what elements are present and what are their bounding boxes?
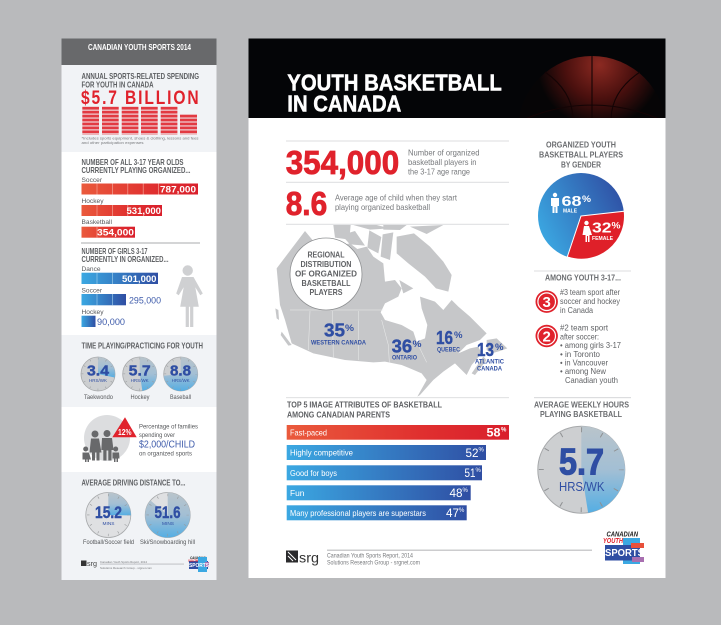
stat: 354,000 players: basketball players in: [408, 157, 477, 167]
heading: top 5 image attributes: TOP 5 IMAGE ATTRIBUTES OF BASKETBALL: [287, 401, 442, 410]
bars: all 3-17 year olds: 531,000: [126, 206, 161, 216]
bar: Highly competitive 52%: [287, 445, 486, 460]
heading: top 5 image attributes: AMONG CANADIAN PARENTS: [287, 410, 390, 419]
text: families spending: on organized sports: [139, 450, 193, 458]
bars: all 3-17 year olds: Basketball: [82, 219, 112, 226]
clock: Hockey 5.7: 5.7: [129, 363, 151, 380]
label: Atlantic Canada 13%: 13: [477, 340, 494, 360]
spending section: FOR YOUTH IN CANADA: [82, 80, 154, 90]
text: families spending: $2,000/CHILD: [139, 440, 195, 451]
bar: Highly competitive 52%: %: [478, 448, 484, 454]
stat: 8.6 average age: playing organized basketball: [335, 202, 430, 212]
badge: number 3: 3: [543, 294, 551, 311]
stat: 8.6 average age: [286, 186, 458, 223]
badge: number 2: 2: [543, 328, 551, 346]
bars: all 3-17 year olds: Hockey: [82, 198, 104, 205]
icon: basketball: [526, 56, 658, 118]
bars: all 3-17 year olds: Soccer: [82, 177, 103, 184]
callout circle: BASKETBALL: [302, 279, 350, 288]
pie chart: players by gender: MALE: [563, 209, 578, 215]
label: Western Canada 35%: WESTERN CANADA: [311, 339, 366, 346]
header band with basketball: [248, 38, 666, 118]
text: families spending: Percentage of families: [139, 424, 199, 430]
logo: Canadian Youth Sports: CANADIAN: [606, 530, 638, 539]
text: number 2 team sport: • in Vancouver: [560, 357, 608, 367]
bars: all 3-17 year olds: CURRENTLY PLAYING ORGANIZED...: [82, 166, 190, 175]
text: number 2 team sport: [560, 322, 621, 385]
spending section: *Includes sports equipment, shoes & clothing, lessons and fees: [82, 136, 199, 140]
text: families spending: [139, 424, 199, 458]
bar: Highly competitive 52%: Highly competitive: [290, 448, 353, 458]
text: number 2 team sport: • among girls 3-17: [560, 340, 621, 350]
panel header: CANADIAN YOUTH SPORTS 2014: [88, 43, 191, 52]
left panel footer: SPORTS: [189, 563, 210, 569]
text: families spending: spending over: [139, 432, 176, 439]
bar: Highly competitive 52%: 52: [466, 446, 479, 460]
clock: Taekwondo 3.4: [81, 357, 115, 401]
bar: Fun 48%: Fun: [290, 488, 305, 498]
stat: 354,000 players: [286, 145, 480, 182]
title: YOUTH BASKETBALL: [287, 70, 502, 96]
bar: Many professional players are superstars 47%: 47: [446, 506, 459, 520]
label: Quebec 16%: QUEBEC: [437, 347, 460, 354]
clock: average weekly hours 5.7: PLAYING BASKETBALL: [540, 409, 622, 419]
pie chart: players by gender: ORGANIZED YOUTH: [546, 140, 616, 150]
callout circle: REGIONAL: [308, 251, 344, 260]
pie chart: players by gender: FEMALE: [592, 236, 614, 242]
stat: 8.6 average age: Average age of child when they start: [335, 192, 458, 202]
title: IN CANADA: [287, 91, 401, 117]
text: number 2 team sport: Canadian youth: [565, 375, 618, 385]
clock: Ski/Snowboarding hill 51.6: [140, 492, 195, 546]
clock: Baseball 8.8: [164, 357, 198, 401]
bars: girls 3-17: [82, 247, 168, 328]
spending section: $5.7 BILLION: [81, 86, 199, 108]
bar: Fun 48%: [287, 485, 471, 500]
clock: Hockey 5.7: HRS/WK: [131, 378, 149, 383]
bar: Many professional players are superstars 47%: %: [459, 508, 465, 514]
bar: Good for boys 51%: 51: [464, 466, 476, 480]
bar: Fast-paced 58%: 58: [486, 426, 501, 440]
text: number 3 team sport: #3 team sport after: [560, 287, 620, 297]
callout circle: OF ORGANIZED: [295, 270, 357, 278]
bar: Good for boys 51%: [287, 465, 482, 480]
block: among youth 3-17: AMONG YOUTH 3-17...: [545, 274, 621, 283]
bar: Fast-paced 58%: Fast-paced: [290, 427, 327, 437]
bars: all 3-17 year olds: NUMBER OF ALL 3-17 YEAR OLDS: [82, 158, 184, 167]
label: Ontario 36%: ONTARIO: [392, 354, 417, 362]
bars: all 3-17 year olds: 787,000: [160, 184, 196, 194]
icon: woman: [176, 265, 203, 327]
label: Ontario 36%: [392, 337, 422, 362]
bar: Good for boys 51%: %: [476, 468, 482, 474]
label: Western Canada 35%: [311, 321, 366, 346]
bar: Good for boys 51%: Good for boys: [290, 468, 337, 478]
text: number 3 team sport: soccer and hockey: [560, 296, 621, 306]
heading: top 5 image attributes: [287, 401, 442, 419]
left panel footer: Solutions Research Group - srgnet.com: [100, 567, 152, 570]
label: Atlantic Canada 13%: CANADA: [477, 365, 502, 372]
icon: srg logo: [286, 550, 319, 566]
clock: Ski/Snowboarding hill 51.6: 51.6: [154, 504, 180, 522]
label: Atlantic Canada 13%: %: [495, 342, 504, 353]
panel header: [62, 38, 216, 65]
heading: time playing: TIME PLAYING/PRACTICING FOR YOUTH: [82, 341, 203, 350]
bars: girls 3-17: 295,000: [129, 296, 161, 306]
map: Canada regional distribution: [275, 225, 507, 397]
label: Western Canada 35%: 35: [324, 321, 345, 341]
icon: family with 12 percent: [82, 415, 137, 462]
clock: Baseball 8.8: HRS/WK: [172, 378, 190, 383]
left panel footer: YOUTH: [188, 558, 198, 563]
stat: 354,000 players: Number of organized: [408, 147, 480, 157]
text: number 3 team sport: [560, 287, 621, 315]
pie chart: players by gender: 32: [592, 220, 612, 237]
clock: average weekly hours 5.7: HRS/WK: [559, 480, 605, 494]
spending section: ANNUAL SPORTS-RELATED SPENDING: [82, 72, 199, 81]
logo: Canadian Youth Sports: [603, 530, 644, 564]
footer: srg source: Canadian Youth Sports Report, 2014: [327, 552, 413, 560]
bars: all 3-17 year olds: 354,000: [97, 228, 134, 238]
stat: 354,000 players: 354,000: [286, 145, 399, 182]
left panel footer: Canadian Youth Sports Report, 2014: [100, 561, 148, 564]
clock: Ski/Snowboarding hill 51.6: MINS: [162, 521, 174, 527]
clock: average weekly hours 5.7: AVERAGE WEEKLY HOURS: [534, 399, 629, 409]
clock: Taekwondo 3.4: HRS/WK: [89, 378, 107, 383]
clock: Football/Soccer field 15.2: [83, 492, 134, 546]
panel: Youth Basketball in Canada: [248, 38, 666, 578]
spending section: [81, 72, 199, 145]
label: Quebec 16%: 16: [436, 328, 453, 348]
pie chart: players by gender: %: [612, 220, 620, 230]
footer: srg source: Solutions Research Group - srgnet.com: [327, 560, 420, 566]
bar chart: image attributes: [287, 425, 509, 520]
bars: girls 3-17: Hockey: [82, 309, 104, 316]
clock: Ski/Snowboarding hill 51.6: Ski/Snowboarding hill: [140, 539, 195, 546]
stat: 354,000 players: the 3-17 age range: [408, 167, 470, 177]
stat: 8.6 average age: 8.6: [286, 186, 327, 223]
clock: Football/Soccer field 15.2: Football/Soccer field: [83, 539, 134, 546]
bar: Many professional players are superstars 47%: [287, 505, 467, 520]
block: among youth 3-17: [536, 274, 621, 385]
label: Quebec 16%: [436, 328, 463, 354]
spending section: and other participation expenses: [82, 141, 144, 145]
bars: all 3-17 year olds: [82, 158, 198, 238]
clock: Baseball 8.8: 8.8: [170, 363, 191, 380]
bar: Many professional players are superstars 47%: Many professional players are superstars: [290, 508, 426, 518]
bar: Fast-paced 58%: [287, 425, 509, 440]
panel: Canadian Youth Sports 2014 summary: [62, 38, 216, 580]
pie chart: players by gender: %: [582, 194, 591, 204]
icon: srg logo: srg: [299, 550, 319, 566]
label: Ontario 36%: %: [412, 339, 422, 350]
callout circle: DISTRIBUTION: [300, 260, 352, 269]
title: [287, 70, 502, 117]
clock: Football/Soccer field 15.2: 15.2: [95, 504, 122, 522]
clock: Football/Soccer field 15.2: MINS: [102, 521, 114, 527]
bars: girls 3-17: CURRENTLY IN ORGANIZED...: [82, 255, 168, 264]
clock: average weekly hours 5.7: [534, 399, 629, 513]
text: number 2 team sport: after soccer:: [560, 331, 599, 341]
pie chart: players by gender: 68: [562, 193, 582, 210]
clock: average weekly hours 5.7: 5.7: [559, 441, 604, 482]
icon: male: [551, 193, 559, 213]
bars: girls 3-17: NUMBER OF GIRLS 3-17: [82, 247, 148, 256]
label: Quebec 16%: %: [454, 330, 463, 341]
left panel footer: srg: [87, 561, 97, 568]
bar: Fast-paced 58%: %: [501, 428, 507, 434]
bar: Fun 48%: %: [462, 488, 468, 494]
label: Ontario 36%: 36: [392, 337, 412, 357]
bars: girls 3-17: Dance: [82, 266, 101, 273]
pie chart: players by gender: [538, 140, 624, 259]
clock: Hockey 5.7: [123, 357, 157, 401]
footer: srg source: [286, 550, 592, 566]
clock: Taekwondo 3.4: 3.4: [87, 363, 110, 380]
text: number 2 team sport: • among New: [560, 366, 607, 376]
pie chart: players by gender: BY GENDER: [561, 159, 601, 169]
bars: girls 3-17: 90,000: [97, 317, 125, 328]
callout circle: PLAYERS: [310, 288, 343, 297]
left panel footer: CANADIAN: [190, 556, 206, 560]
bars: girls 3-17: 501,000: [122, 274, 156, 284]
logo: Canadian Youth Sports: SPORTS: [605, 548, 644, 559]
clock: Baseball 8.8: Baseball: [170, 394, 191, 401]
bars: girls 3-17: Soccer: [82, 288, 103, 295]
left panel footer: [81, 556, 210, 572]
callout circle: [290, 238, 362, 310]
text: number 2 team sport: • in Toronto: [560, 349, 600, 359]
label: Atlantic Canada 13%: [475, 340, 504, 372]
pie chart: players by gender: BASKETBALL PLAYERS: [539, 150, 623, 160]
clock: Hockey 5.7: Hockey: [130, 394, 150, 401]
text: number 3 team sport: in Canada: [560, 305, 593, 315]
label: Western Canada 35%: %: [345, 323, 355, 334]
icon: female: [582, 221, 592, 242]
icon: family with 12 percent: 12%: [118, 428, 132, 437]
logo: Canadian Youth Sports: YOUTH: [603, 536, 623, 545]
heading: driving distance: AVERAGE DRIVING DISTANCE TO...: [82, 479, 186, 488]
map shape: [275, 225, 507, 397]
bar: Fun 48%: 48: [450, 486, 463, 500]
clock: Taekwondo 3.4: Taekwondo: [84, 394, 113, 401]
text: number 2 team sport: #2 team sport: [560, 322, 609, 332]
label: Atlantic Canada 13%: ATLANTIC: [475, 358, 504, 365]
